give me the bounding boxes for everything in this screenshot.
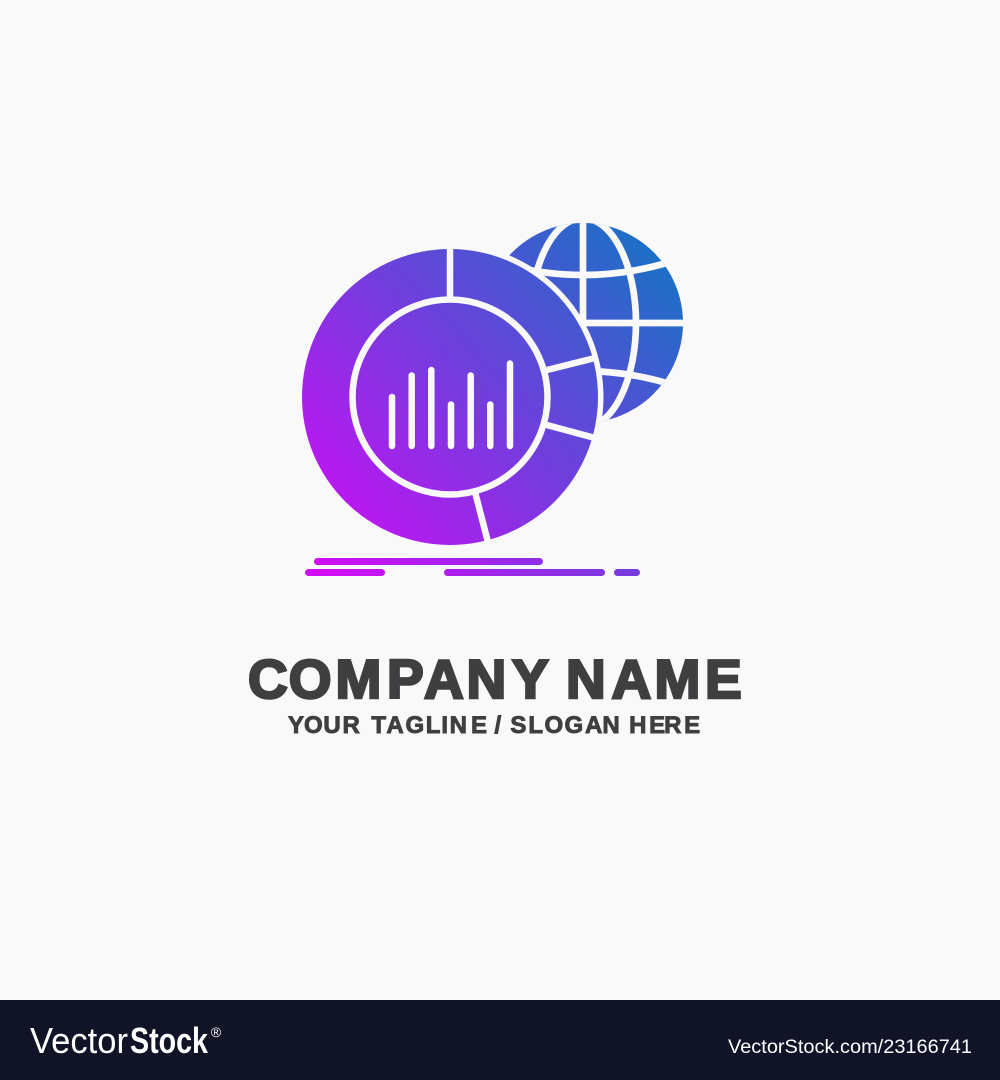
ground lines [305, 558, 640, 576]
full page infographic [0, 223, 1000, 1080]
icon: donut chart [302, 245, 598, 546]
footer image id: VectorStock.com/23166741 [728, 1036, 972, 1058]
tagline: YOUR TAGLINE/SLOGAN HERE [288, 712, 700, 739]
icon: globe [509, 223, 683, 422]
footer logo: Vector [30, 1020, 128, 1061]
bar chart inside donut [392, 364, 510, 446]
footer bar [0, 1000, 1000, 1080]
footer logo [30, 1020, 209, 1061]
title: company name: COMPANY NAME [248, 648, 742, 710]
registered mark: ® [211, 1024, 222, 1040]
footer logo: Stock [130, 1020, 209, 1061]
